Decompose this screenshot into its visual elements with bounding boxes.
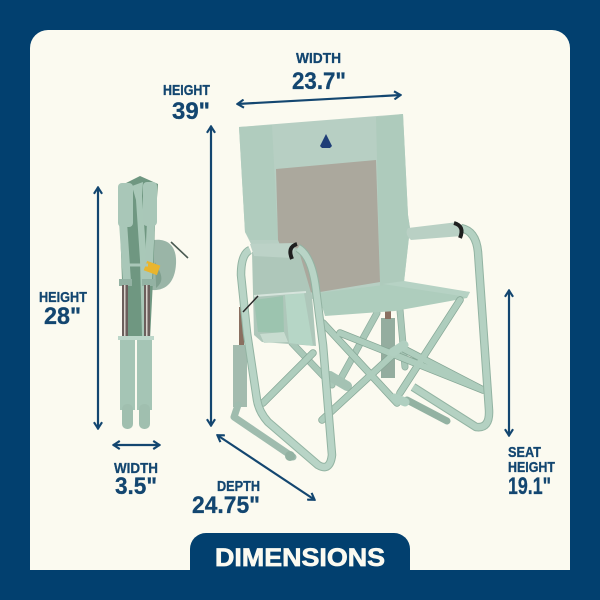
lower sleeves — [120, 336, 135, 410]
back fabric — [239, 114, 410, 300]
label: chair height — [163, 82, 210, 125]
unfolded chair — [233, 114, 489, 467]
label: folded width — [114, 460, 158, 500]
left arm — [250, 243, 296, 258]
label: chair width — [292, 50, 346, 95]
arrow: folded width — [113, 444, 160, 446]
rear legs — [292, 310, 405, 386]
mesh panel — [276, 160, 380, 293]
folded fabric — [120, 176, 158, 340]
pocket — [252, 248, 316, 346]
cord — [243, 296, 258, 312]
label: depth — [192, 478, 260, 519]
label: seat height: 19.1" — [508, 473, 551, 500]
folded chair — [118, 176, 188, 429]
right frame — [413, 228, 489, 427]
label: folded height — [39, 289, 87, 330]
label: chair height: 39" — [172, 98, 210, 125]
arrow: seat height — [508, 290, 510, 436]
label: seat height — [508, 444, 555, 500]
label: depth: DEPTH — [217, 478, 260, 495]
arrow: depth — [217, 435, 315, 500]
arrow: folded height — [97, 187, 99, 429]
upper tubes — [118, 183, 133, 227]
label: chair width: WIDTH — [296, 50, 341, 67]
label: folded width: 3.5" — [115, 473, 157, 500]
label: seat height: HEIGHT — [508, 459, 555, 476]
yellow tag — [144, 261, 160, 275]
label: folded height: HEIGHT — [39, 289, 87, 306]
label: chair width: 23.7" — [292, 68, 346, 95]
heading tab: dimensions: DIMENSIONS — [215, 544, 385, 572]
joints — [393, 345, 405, 402]
cross legs — [263, 300, 483, 420]
logo — [320, 134, 332, 148]
right armrest — [407, 222, 462, 240]
arrow: chair height — [210, 126, 212, 426]
bag — [152, 240, 176, 290]
left frame loop — [241, 248, 332, 467]
label: folded width: WIDTH — [114, 460, 158, 477]
left post — [233, 307, 295, 461]
heading tab: dimensions — [190, 533, 410, 572]
label: depth: 24.75" — [192, 492, 260, 519]
right rocker foot — [407, 400, 447, 421]
steel rods — [122, 285, 128, 337]
label: chair height: HEIGHT — [163, 82, 210, 99]
label: folded height: 28" — [44, 303, 81, 330]
label: seat height: SEAT — [508, 444, 541, 461]
arrow: chair width — [237, 95, 401, 104]
right post — [381, 318, 395, 378]
seat — [318, 283, 470, 316]
feet — [122, 404, 133, 429]
